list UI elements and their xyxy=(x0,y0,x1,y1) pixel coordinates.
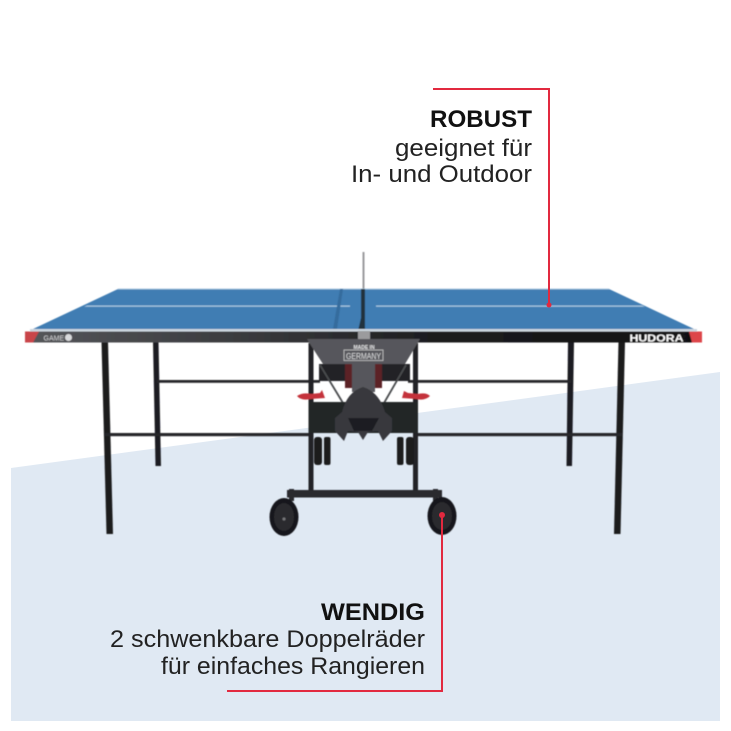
horizontal braces xyxy=(105,380,622,436)
red accent xyxy=(345,364,382,388)
red corner right xyxy=(689,332,702,342)
table top surface xyxy=(33,289,694,329)
front legs xyxy=(102,342,625,534)
label: made in Germany xyxy=(344,345,383,361)
left wheel xyxy=(270,498,298,536)
lower frame panel xyxy=(308,402,418,433)
central mechanism xyxy=(335,387,392,441)
label: made in Germany: GERMANY xyxy=(346,352,382,361)
right wheel xyxy=(428,497,456,535)
black rear plates xyxy=(319,364,410,381)
text block: wendig: WENDIG xyxy=(321,599,425,626)
text block: robust: geeignet für xyxy=(395,135,532,162)
text block: robust xyxy=(351,106,532,188)
label: HUDORA: HUDORA xyxy=(630,334,684,344)
label: made in Germany: MADE IN xyxy=(353,345,375,351)
red handles xyxy=(297,390,430,400)
table front edge xyxy=(30,329,697,332)
center frame uprights xyxy=(308,343,418,495)
label: GAME: GAME xyxy=(44,336,64,342)
text block: wendig: 2 schwenkbare Doppelräder xyxy=(110,626,425,653)
callout line: wendig xyxy=(227,512,445,691)
background: pale blue floor xyxy=(11,372,720,721)
diagonal struts xyxy=(320,365,406,403)
lower axle xyxy=(287,490,442,498)
text block: wendig xyxy=(110,599,425,680)
center bracket panel xyxy=(307,339,420,392)
callout line: robust xyxy=(433,89,552,308)
net post xyxy=(362,252,364,290)
net clamp xyxy=(358,331,370,343)
text block: wendig: für einfaches Rangieren xyxy=(161,653,425,680)
text block: robust: In- und Outdoor xyxy=(351,161,532,188)
table tennis table xyxy=(25,252,702,536)
net xyxy=(358,289,365,331)
rear legs xyxy=(153,342,574,466)
text block: robust: ROBUST xyxy=(430,106,532,133)
table fascia xyxy=(25,332,702,342)
inner double wheels xyxy=(314,437,414,465)
icon: small circle badge xyxy=(65,334,72,341)
red corner left xyxy=(25,332,39,342)
table markings xyxy=(84,288,645,307)
